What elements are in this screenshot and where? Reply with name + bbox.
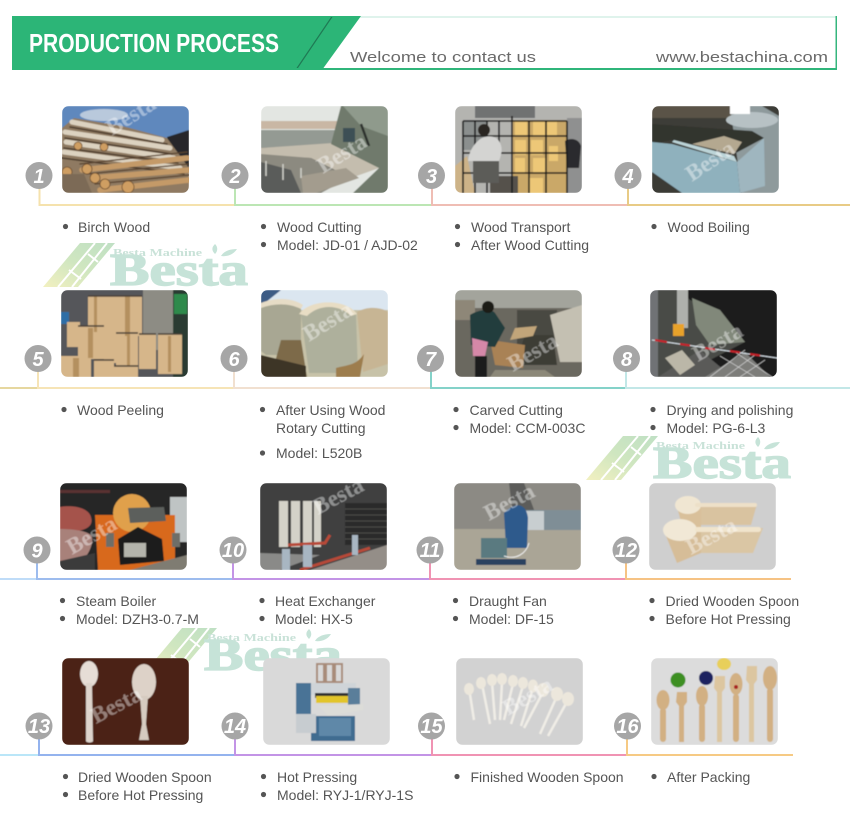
step 4 <box>614 106 779 235</box>
photo: heat exchanger: Besta <box>309 472 368 519</box>
step 5 <box>24 290 188 418</box>
photo: drying and polishing: Besta <box>688 318 747 366</box>
caption 14 <box>261 769 413 803</box>
welcome text: Welcome to contact us <box>350 49 536 66</box>
caption 13 <box>63 769 212 803</box>
caption 5: Wood Peeling <box>77 402 164 418</box>
caption 11: Model: DF-15 <box>469 611 554 627</box>
photo: wooden cutlery after packing <box>651 658 778 745</box>
caption 7: Carved Cutting <box>470 402 563 418</box>
photo: wood boiling tank <box>652 106 779 193</box>
step 12 <box>612 483 799 627</box>
number badge 11: 11 <box>420 540 440 562</box>
caption 12: Before Hot Pressing <box>666 611 791 627</box>
photo: finished wooden spoons <box>456 658 583 745</box>
photo: rotary cut veneer rolls <box>261 290 388 377</box>
timeline row 2 <box>0 371 850 388</box>
number badge 3: 3 <box>426 166 437 188</box>
website: www.bestachina.com <box>655 49 828 66</box>
step 10 <box>220 472 387 627</box>
number badge 9 <box>24 536 50 564</box>
photo: wood cutting machine: Besta <box>312 128 372 178</box>
number badge 3 <box>418 162 445 189</box>
photo: peeled logs <box>61 290 188 377</box>
timeline row 4 <box>0 739 793 755</box>
watermark logo 1: Besta Machine <box>113 247 202 259</box>
photo: heat exchanger <box>260 483 387 570</box>
caption 10: Heat Exchanger <box>275 593 376 609</box>
step 6 <box>220 290 388 461</box>
step 9 <box>24 483 199 627</box>
caption 13: Before Hot Pressing <box>78 787 203 803</box>
caption 3 <box>455 219 589 253</box>
caption 3: After Wood Cutting <box>471 237 589 253</box>
caption 6: After Using Wood <box>276 402 385 418</box>
number badge 8: 8 <box>621 349 633 371</box>
caption 9: Steam Boiler <box>76 593 156 609</box>
banner green ribbon <box>12 16 361 70</box>
number badge 9: 9 <box>31 540 43 562</box>
caption 3: Wood Transport <box>471 219 570 235</box>
caption 12 <box>649 593 799 627</box>
photo: two pale spoons on brown <box>62 658 189 745</box>
number badge 4 <box>614 162 642 189</box>
number badge 6: 6 <box>228 349 240 371</box>
number badge 13: 13 <box>28 716 50 738</box>
caption 7: Model: CCM-003C <box>470 420 585 436</box>
number badge 5: 5 <box>32 349 44 371</box>
step 16 <box>614 658 778 785</box>
step 8 <box>613 290 793 436</box>
photo: carved cutting workers <box>455 290 582 377</box>
step 13 <box>26 658 212 803</box>
number badge 10 <box>220 536 246 564</box>
caption 7 <box>453 402 585 436</box>
step 2 <box>222 106 418 253</box>
caption 14: Hot Pressing <box>277 769 357 785</box>
number badge 10: 10 <box>222 540 244 562</box>
caption 8: Model: PG-6-L3 <box>666 420 766 436</box>
photo: wood transport cage <box>455 106 582 193</box>
caption 15: Finished Wooden Spoon <box>470 769 624 785</box>
caption 10: Model: HX-5 <box>275 611 353 627</box>
number badge 1: 1 <box>33 166 45 188</box>
watermark logo 2: Besta Machine <box>656 440 745 452</box>
number badge 4: 4 <box>621 166 634 188</box>
photo: hot pressing machine <box>263 658 390 745</box>
photo: dried wooden spoon blanks <box>649 483 776 570</box>
caption 8: Drying and polishing <box>666 402 793 418</box>
photo: rotary cut veneer rolls: Besta <box>298 296 358 346</box>
number badge 14 <box>222 712 248 740</box>
caption 6 <box>260 402 385 461</box>
step 15 <box>418 658 624 785</box>
caption 6: Model: L520B <box>276 445 362 461</box>
caption 1: Birch Wood <box>78 219 150 235</box>
number badge 7: 7 <box>425 349 437 371</box>
photo: birch logs <box>62 106 189 193</box>
caption 2 <box>261 219 418 253</box>
timeline row 1 <box>40 188 850 205</box>
watermark logo 1 <box>43 243 248 295</box>
step 7 <box>417 290 585 436</box>
caption 10 <box>259 593 376 627</box>
photo: two pale spoons on brown: Besta <box>87 681 146 728</box>
caption 2: Model: JD-01 / AJD-02 <box>277 237 418 253</box>
photo: birch logs: Besta <box>101 90 161 140</box>
step 11 <box>416 478 581 627</box>
banner slash <box>296 17 332 68</box>
photo: wood cutting machine <box>261 106 388 193</box>
number badge 1 <box>26 162 52 189</box>
watermark logo 3 <box>145 628 342 680</box>
number badge 14: 14 <box>224 716 246 738</box>
number badge 8 <box>613 345 640 372</box>
caption 9 <box>60 593 199 627</box>
photo: draught fan: Besta <box>480 478 539 525</box>
watermark logo 3: Besta <box>204 629 342 680</box>
number badge 13 <box>26 712 52 740</box>
photo: drying and polishing <box>650 290 777 377</box>
photo: carved cutting workers: Besta <box>503 328 562 376</box>
number badge 15: 15 <box>420 716 443 738</box>
caption 16: After Packing <box>667 769 750 785</box>
number badge 12: 12 <box>615 540 637 562</box>
watermark logo 2 <box>586 436 791 488</box>
caption 12: Dried Wooden Spoon <box>666 593 799 609</box>
number badge 11 <box>416 536 444 564</box>
watermark logo 1: Besta <box>110 244 248 295</box>
step 14 <box>222 658 413 803</box>
number badge 16 <box>614 712 641 740</box>
watermark logo 2: Besta <box>653 437 791 488</box>
photo: finished wooden spoons: Besta <box>498 672 557 720</box>
caption 13: Dried Wooden Spoon <box>78 769 212 785</box>
number badge 2: 2 <box>228 166 241 188</box>
caption 4: Wood Boiling <box>668 219 750 235</box>
header banner <box>12 16 837 70</box>
number badge 7 <box>417 345 444 372</box>
number badge 5 <box>24 345 52 372</box>
step 1 <box>26 106 189 232</box>
caption 11 <box>453 593 554 627</box>
caption 6: Rotary Cutting <box>276 420 365 436</box>
number badge 6 <box>220 345 248 372</box>
photo: draught fan <box>454 478 581 570</box>
timeline row 3 <box>0 563 791 579</box>
photo: dried wooden spoon blanks: Besta <box>682 512 741 559</box>
watermark logo 3: Besta Machine <box>207 632 296 644</box>
caption 8 <box>650 402 793 436</box>
step 3 <box>418 106 589 253</box>
number badge 16: 16 <box>616 716 639 738</box>
number badge 2 <box>222 162 248 189</box>
photo: steam boiler <box>60 483 187 570</box>
caption 9: Model: DZH3-0.7-M <box>76 611 199 627</box>
caption 2: Wood Cutting <box>277 219 362 235</box>
number badge 12 <box>612 536 640 564</box>
caption 11: Draught Fan <box>469 593 547 609</box>
title: PRODUCTION PROCESS <box>29 28 279 58</box>
number badge 15 <box>418 712 445 740</box>
caption 14: Model: RYJ-1/RYJ-1S <box>277 787 413 803</box>
photo: steam boiler: Besta <box>62 511 121 559</box>
photo: wood boiling tank: Besta <box>681 135 740 186</box>
